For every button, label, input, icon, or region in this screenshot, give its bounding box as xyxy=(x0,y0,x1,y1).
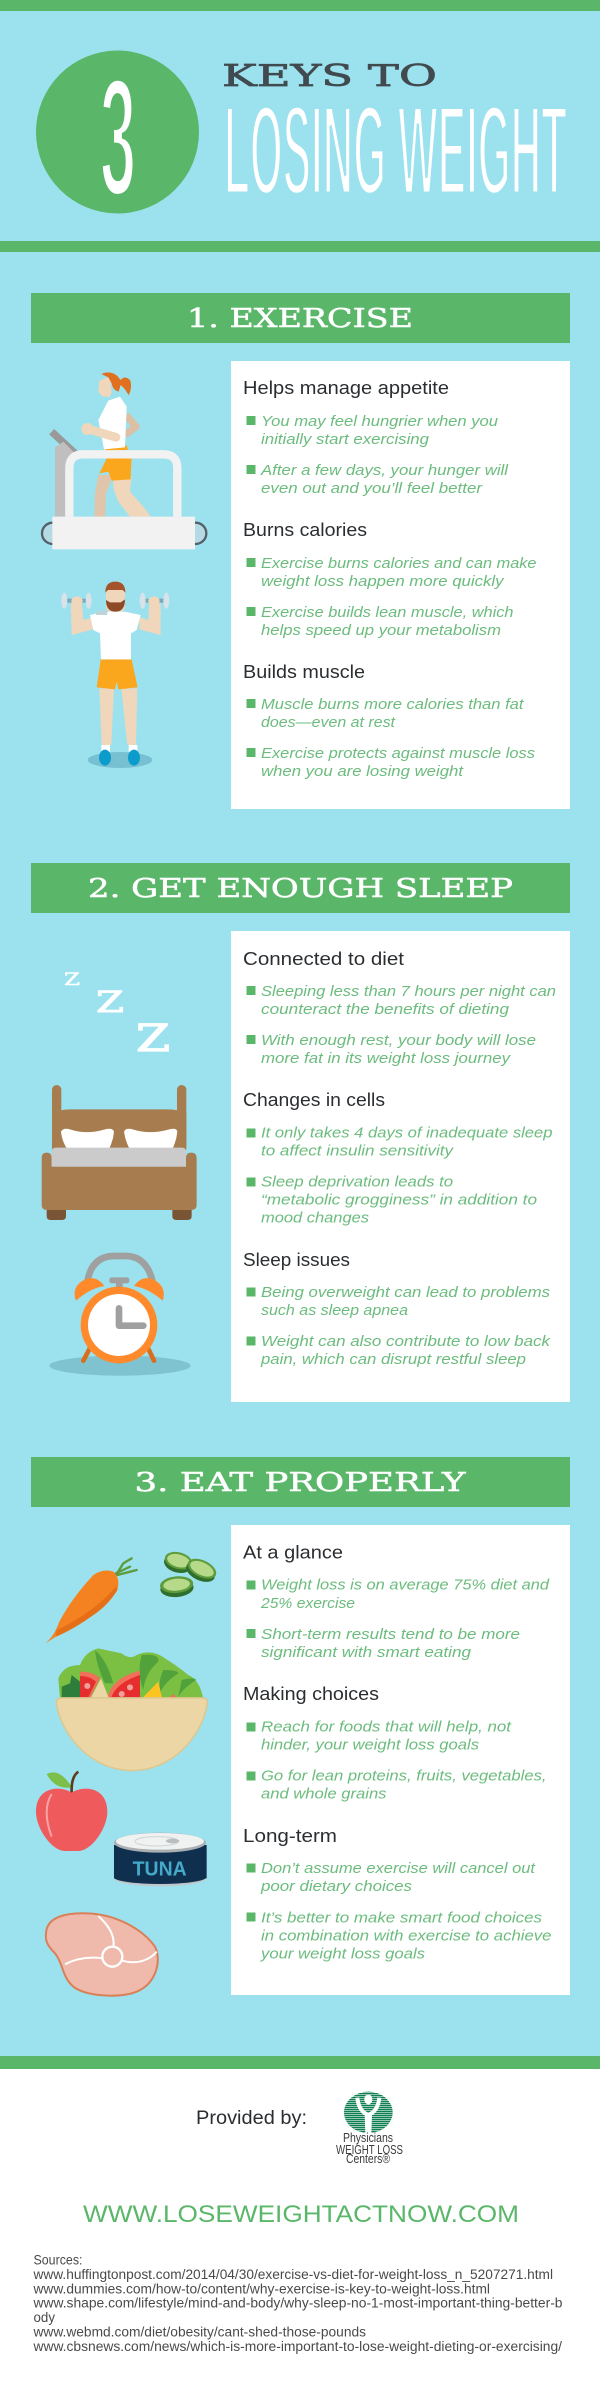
sources: www.huffingtonpost.com/2014/04/30/exercise-vs-diet-for-weight-loss_n_5207271.html xyxy=(32,2267,553,2282)
heading: builds muscle: Builds muscle xyxy=(243,662,365,682)
icon: sleeping Zs xyxy=(64,970,170,1060)
panel: sleep text xyxy=(231,931,570,1402)
bullet: It only takes 4 days of inadequate sleep xyxy=(261,1124,552,1142)
bullet: Exercise builds lean muscle, which xyxy=(261,604,514,621)
number badge xyxy=(36,43,199,231)
bullet xyxy=(246,696,524,731)
bullet xyxy=(246,1626,520,1661)
bullet: After a few days, your hunger will xyxy=(260,462,509,479)
logo: Physicians Weight Loss Centers xyxy=(336,2092,403,2166)
bullet: mood changes xyxy=(261,1210,370,1226)
bullet: It’s better to make smart food choices xyxy=(261,1910,543,1926)
section banner: sleep xyxy=(31,863,570,913)
bullet: Go for lean proteins, fruits, vegetables, xyxy=(261,1768,546,1784)
panel: eating text xyxy=(231,1525,570,1995)
heading: at a glance: At a glance xyxy=(243,1542,343,1562)
icon: tuna can xyxy=(114,1833,207,1886)
bullet: does—even at rest xyxy=(261,714,396,731)
section banner: eat: 3. EAT PROPERLY xyxy=(134,1468,467,1498)
bullet: helps speed up your metabolism xyxy=(261,622,501,639)
bullet: significant with smart eating xyxy=(261,1644,472,1661)
bullet: weight loss happen more quickly xyxy=(261,573,505,590)
bullet: Weight can also contribute to low back xyxy=(261,1333,552,1350)
provided by label: Provided by: xyxy=(196,2108,307,2129)
icon: salad bowl xyxy=(58,1648,203,1699)
section banner: eat xyxy=(31,1457,570,1507)
section banner: sleep: 2. GET ENOUGH SLEEP xyxy=(88,874,513,904)
sources: Sources: xyxy=(34,2252,82,2268)
website url: WWW.LOSEWEIGHTACTNOW.COM xyxy=(83,2201,519,2228)
bullet: even out and you’ll feel better xyxy=(261,480,483,497)
sources: ody xyxy=(34,2310,55,2325)
icon: steak xyxy=(46,1913,158,1996)
icon: tuna can: TUNA xyxy=(133,1858,187,1880)
number badge: 3 xyxy=(100,43,136,231)
sources: www.cbsnews.com/news/which-is-more-important-to-lose-weight-dieting-or-exercising/ xyxy=(32,2339,562,2354)
heading: connected to diet: Connected to diet xyxy=(243,949,404,969)
bullet: in combination with exercise to achieve xyxy=(261,1928,552,1944)
sources xyxy=(32,2252,563,2354)
bullet xyxy=(246,1284,551,1319)
bullet: Weight loss is on average 75% diet and xyxy=(261,1576,550,1594)
bullet xyxy=(246,604,514,639)
icon: woman on treadmill xyxy=(42,372,206,549)
bullet: Exercise burns calories and can make xyxy=(261,555,536,572)
section banner: exercise: 1. EXERCISE xyxy=(187,304,413,334)
icon: bed xyxy=(42,1085,197,1220)
logo text: Physicians xyxy=(343,2131,393,2145)
icon: sleeping Zs: Z xyxy=(64,970,80,990)
bullet: Sleep deprivation leads to xyxy=(261,1174,453,1190)
logo text: Centers® xyxy=(346,2152,391,2166)
bullet: 25% exercise xyxy=(260,1595,355,1612)
bullet: “metabolic grogginess” in addition to xyxy=(261,1192,537,1208)
bullet: such as sleep apnea xyxy=(261,1302,408,1319)
bullet: Exercise protects against muscle loss xyxy=(261,745,536,762)
icon: alarm clock xyxy=(49,1256,191,1376)
bullet: initially start exercising xyxy=(261,431,430,448)
icon: apple xyxy=(36,1772,107,1851)
logo mark xyxy=(344,2092,393,2133)
bullet xyxy=(246,745,536,780)
bullet: You may feel hungrier when you xyxy=(261,413,499,430)
bullet xyxy=(246,1718,512,1754)
bullet: your weight loss goals xyxy=(260,1946,426,1962)
bullet: counteract the benefits of dieting xyxy=(261,1001,510,1018)
sources: www.dummies.com/how-to/content/why-exercise-is-key-to-weight-loss.html xyxy=(32,2282,490,2296)
bullet: Don’t assume exercise will cancel out xyxy=(261,1860,536,1877)
bullet xyxy=(246,1576,550,1612)
bullet xyxy=(246,1860,536,1895)
bullet xyxy=(246,413,499,448)
bullet: pain, which can disrupt restful sleep xyxy=(260,1351,526,1368)
heading: long-term: Long-term xyxy=(243,1826,337,1846)
bullet xyxy=(246,1124,552,1160)
heading: burns calories: Burns calories xyxy=(243,520,367,540)
heading: sleep issues: Sleep issues xyxy=(243,1250,350,1270)
bullet xyxy=(246,462,509,497)
bullet: Sleeping less than 7 hours per night can xyxy=(261,983,556,1000)
bullet xyxy=(246,1910,552,1962)
sources: www.webmd.com/diet/obesity/cant-shed-those-pounds xyxy=(32,2324,366,2340)
icon: sleeping Zs: Z xyxy=(96,985,124,1019)
heading: changes in cells: Changes in cells xyxy=(243,1090,385,1110)
icon: carrot xyxy=(45,1558,137,1643)
header divider xyxy=(0,241,600,252)
bullet: Short-term results tend to be more xyxy=(261,1626,520,1643)
bullet: hinder, your weight loss goals xyxy=(261,1736,480,1754)
icon: cucumber slices xyxy=(159,1549,219,1598)
panel: exercise text xyxy=(231,361,570,809)
bullet xyxy=(246,1333,552,1368)
heading: helps manage appetite: Helps manage appetite xyxy=(243,378,449,398)
bullet: poor dietary choices xyxy=(260,1878,413,1895)
footer divider xyxy=(0,2056,600,2069)
bullet: Being overweight can lead to problems xyxy=(261,1284,551,1301)
logo text xyxy=(336,2131,403,2166)
icon: man lifting dumbbells xyxy=(61,582,169,768)
sources: www.shape.com/lifestyle/mind-and-body/why-sleep-no-1-most-important-thing-better-b xyxy=(32,2296,563,2310)
logo text: WEIGHT LOSS xyxy=(336,2143,403,2157)
bullet xyxy=(246,1768,546,1802)
icon: sleeping Zs: Z xyxy=(136,1017,170,1060)
bullet xyxy=(246,555,536,590)
heading: making choices: Making choices xyxy=(243,1684,379,1704)
bullet: to affect insulin sensitivity xyxy=(261,1142,455,1160)
bullet xyxy=(246,1174,537,1226)
bullet: more fat in its weight loss journey xyxy=(261,1050,512,1067)
bullet: With enough rest, your body will lose xyxy=(261,1032,536,1049)
bullet xyxy=(246,1032,536,1067)
header xyxy=(36,43,567,231)
title line one: KEYS TO xyxy=(222,59,437,94)
bowl xyxy=(56,1698,207,1771)
section banner: exercise xyxy=(31,293,570,343)
bullet: Muscle burns more calories than fat xyxy=(261,696,524,713)
bullet: Reach for foods that will help, not xyxy=(261,1718,512,1736)
bullet: and whole grains xyxy=(261,1786,387,1802)
bullet: when you are losing weight xyxy=(261,763,464,780)
top bar xyxy=(0,0,600,11)
bullet xyxy=(246,983,556,1018)
